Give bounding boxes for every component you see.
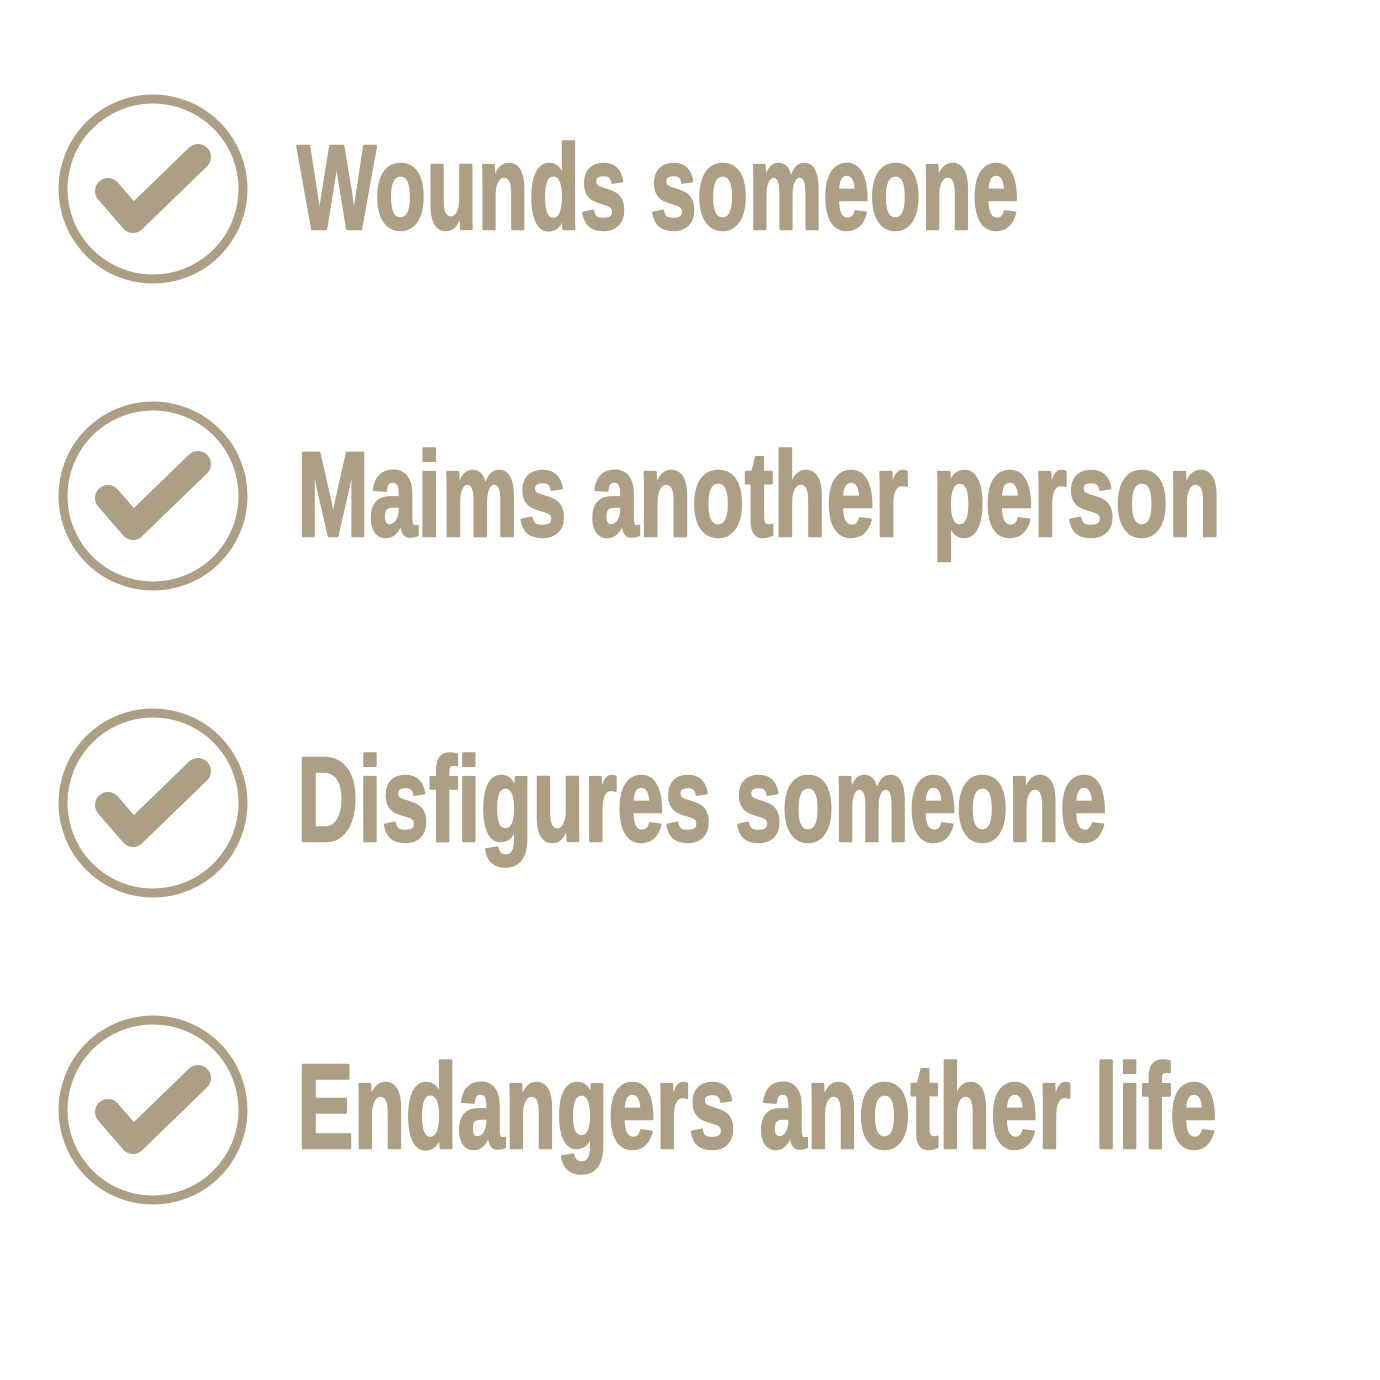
icon: check circle 3 bbox=[63, 713, 243, 893]
icon: check circle 4 bbox=[63, 1020, 243, 1200]
item: endangers another life bbox=[63, 1020, 1217, 1200]
icon: check circle 2 bbox=[63, 406, 243, 586]
item: wounds someone bbox=[63, 99, 1019, 279]
text: Wounds someone: Wounds someone bbox=[297, 119, 1019, 255]
icon: check circle 1 bbox=[63, 99, 243, 279]
item: maims another person bbox=[63, 406, 1221, 586]
item: disfigures someone bbox=[63, 713, 1107, 893]
